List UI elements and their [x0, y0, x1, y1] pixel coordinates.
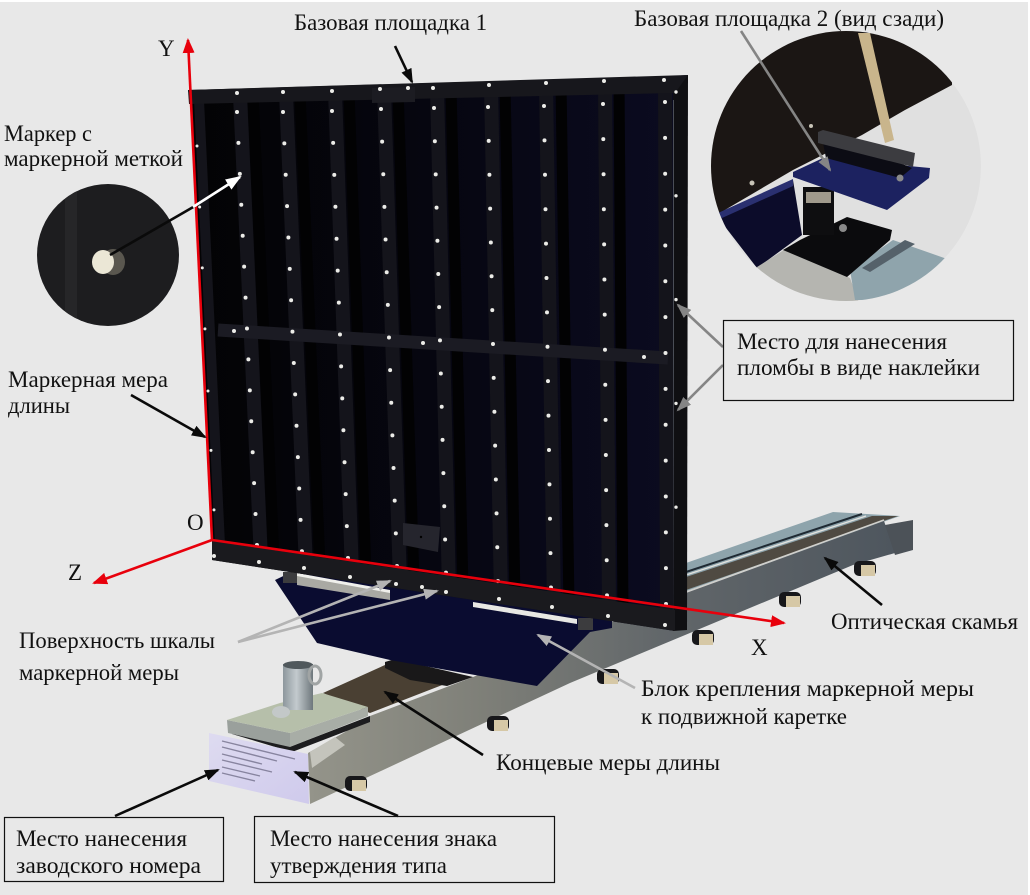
arrow: serial number — [115, 770, 218, 816]
blue plate — [793, 158, 930, 210]
arrow: type approval mark — [295, 772, 398, 816]
label: optical bench: Оптическая скамья — [831, 609, 1018, 634]
axis letters: X — [751, 635, 768, 660]
callout: type approval mark — [254, 816, 554, 882]
callout: serial number: Место нанесения — [16, 826, 187, 851]
arrow: scale surface 2 — [238, 591, 437, 642]
stick — [858, 33, 894, 143]
scale surfaces — [283, 572, 593, 630]
label: scale surface: Поверхность шкалы — [19, 628, 215, 653]
label: length measure — [8, 367, 168, 418]
callout: seal place: Место для нанесения — [737, 329, 947, 354]
axes — [94, 40, 784, 623]
panel body — [188, 76, 675, 631]
axis Y — [188, 40, 212, 540]
label: length measure: Маркерная мера — [8, 367, 168, 392]
cylinder — [803, 187, 834, 235]
label: length measure: длины — [8, 393, 70, 418]
callout: type approval mark: Место нанесения знака — [270, 826, 497, 851]
axis X — [212, 540, 784, 623]
rail top surface — [686, 512, 900, 592]
label: mount block: Блок крепления маркерной меры — [641, 676, 974, 701]
axis letters — [68, 36, 768, 660]
marker mount block — [275, 568, 612, 686]
vertical ribs — [199, 80, 667, 622]
arrow: length measure — [131, 395, 205, 437]
label: mount block — [641, 676, 974, 729]
horizontal bar — [218, 330, 668, 358]
arrow: mount block — [538, 635, 635, 688]
optical bench — [308, 512, 913, 804]
arrows — [110, 31, 882, 816]
axis letters: Y — [158, 36, 175, 61]
band dots — [212, 78, 667, 627]
arrow: optical bench — [825, 558, 882, 605]
mounting plate and cylinder — [227, 661, 370, 752]
nameplate — [209, 733, 309, 804]
arrow: seal bottom — [678, 365, 723, 410]
arrow: marker white part — [193, 177, 240, 207]
rear panel — [711, 31, 952, 213]
label: marker — [4, 121, 183, 171]
axis Z — [94, 540, 212, 583]
label: scale surface: маркерной меры — [19, 660, 179, 685]
callout: serial number: заводского номера — [16, 853, 201, 878]
arrow: gauge blocks — [385, 692, 483, 755]
callout: serial number — [4, 818, 224, 882]
label: platform 2: Базовая площадка 2 (вид сзади) — [634, 6, 944, 31]
light reflection near front — [310, 737, 345, 768]
arrow: scale surface 1 — [238, 581, 390, 642]
bench side face — [308, 521, 895, 804]
label: gauge blocks: Концевые меры длины — [496, 750, 720, 775]
callout: type approval mark: утверждения типа — [270, 853, 447, 878]
callout: seal place: пломбы в виде наклейки — [737, 355, 980, 380]
dark block under bar — [823, 143, 912, 178]
inset: marker close-up — [37, 184, 179, 326]
rail — [850, 240, 950, 300]
axis letters: Z — [68, 560, 82, 585]
side face — [673, 75, 688, 631]
inset: base platform 2 rear view — [711, 31, 952, 301]
panel: base platform 1 — [188, 75, 688, 631]
rib shadows — [253, 82, 623, 614]
bench end bracket — [885, 520, 913, 555]
arrow: marker black part — [110, 206, 195, 255]
label: platform 1: Базовая площадка 1 — [294, 10, 487, 35]
arrow: platform 2 — [741, 31, 830, 170]
grey floor — [757, 250, 858, 301]
label: mount block: к подвижной каретке — [641, 704, 847, 729]
arrow: platform 1 — [395, 46, 412, 82]
marker dots — [197, 92, 676, 611]
bench feet — [345, 561, 876, 791]
grey bar — [818, 130, 915, 167]
label: scale surface — [19, 628, 215, 685]
black base — [783, 217, 892, 277]
blue base left — [718, 180, 802, 268]
axis letters: O — [187, 510, 204, 535]
label: marker: Маркер с — [4, 121, 92, 146]
gauge blocks — [323, 659, 473, 713]
label: marker: маркерной меткой — [4, 146, 183, 171]
callout: seal place — [724, 320, 1014, 400]
center plate — [403, 523, 440, 552]
frame bands — [188, 75, 688, 104]
bolts — [896, 174, 904, 182]
arrow: seal top — [678, 305, 723, 347]
